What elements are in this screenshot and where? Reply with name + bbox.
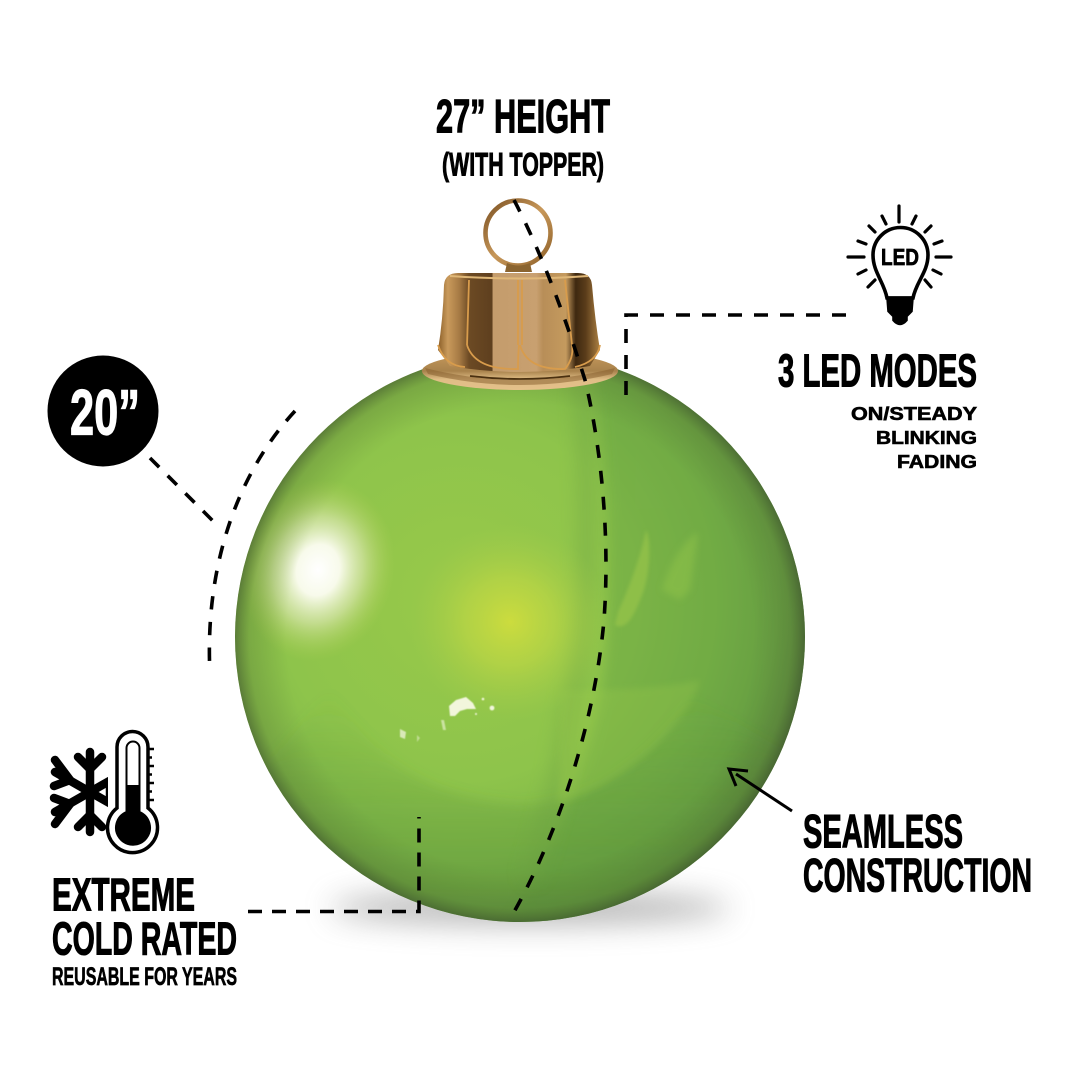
LED modes list: ON/STEADY	[851, 404, 977, 424]
ground shadow	[330, 892, 730, 924]
hanging ring	[486, 200, 550, 266]
height title: 27” HEIGHT	[436, 90, 610, 142]
cold rated heading: COLD RATED	[52, 912, 237, 964]
cold rated heading	[52, 868, 237, 991]
icon: LED bulb	[848, 206, 951, 324]
cold rated subtitle: REUSABLE FOR YEARS	[52, 963, 237, 991]
LED modes heading	[778, 344, 977, 472]
icon: snowflake and thermometer	[54, 732, 158, 853]
cap base flange	[422, 352, 618, 390]
thermometer	[108, 732, 158, 853]
ornament ball	[235, 369, 805, 922]
diameter badge: 20”	[70, 376, 140, 448]
LED modes list	[851, 404, 977, 472]
diameter leader line	[150, 458, 215, 523]
height dashed guide	[514, 200, 606, 912]
LED dashed leader	[626, 315, 846, 396]
icon: LED bulb: LED	[881, 244, 919, 270]
cold rated dashed leader	[248, 817, 419, 912]
cap body	[438, 273, 600, 372]
seamless construction label	[803, 804, 1032, 902]
height subtitle: (WITH TOPPER)	[442, 146, 604, 182]
gold topper	[422, 200, 618, 390]
seamless arrow	[729, 769, 792, 811]
LED modes list: BLINKING	[876, 428, 977, 448]
height title	[436, 90, 610, 182]
diameter badge	[48, 356, 158, 466]
seamless construction label: SEAMLESS	[803, 804, 963, 858]
cold rated heading: EXTREME	[52, 868, 195, 920]
diameter dashed arc	[209, 411, 295, 661]
snowflake	[54, 752, 125, 832]
LED modes list: FADING	[897, 452, 977, 472]
